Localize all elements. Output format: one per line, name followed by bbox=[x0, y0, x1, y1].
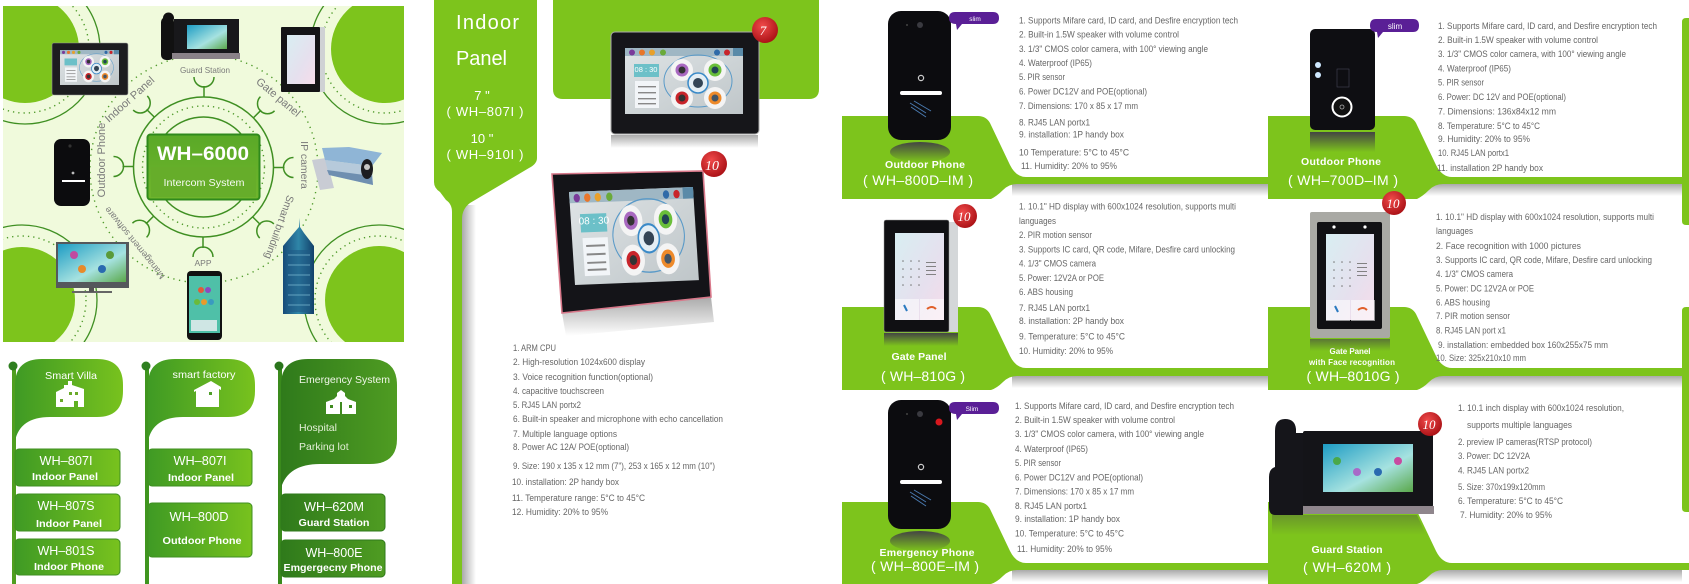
tab: guard station WH-620M: Guard Station bbox=[1312, 544, 1382, 556]
spec list: indoor panel bbox=[512, 343, 723, 517]
spec list: WH-8010G: 10. Size: 325x210x10 mm bbox=[1436, 353, 1526, 363]
button: WH-800D Outdoor Phone: Outdoor Phone bbox=[162, 535, 242, 547]
spec list: WH-700D-IM: 10. RJ45 LAN portx1 bbox=[1438, 148, 1509, 158]
model list: WH-807I and WH-910I: ( WH–910I ) bbox=[446, 147, 524, 162]
model list: WH-807I and WH-910I: ( WH–807I ) bbox=[446, 104, 524, 119]
panel: green banner bbox=[553, 0, 819, 99]
heading: Indoor Panel bbox=[456, 12, 519, 70]
spec list: WH-8010G: 8. RJ45 LAN port x1 bbox=[1436, 326, 1506, 336]
badge: 10 inch bbox=[701, 151, 727, 177]
spec list: indoor panel: 12. Humidity: 20% to 95% bbox=[512, 507, 608, 517]
flag title: Emergency System: Emergency System bbox=[299, 374, 390, 386]
button: WH-800D Outdoor Phone: WH–800D bbox=[170, 510, 228, 524]
spec list: WH-620M: 6. Temperature: 5°C to 45°C bbox=[1458, 496, 1563, 506]
device: outdoor phone WH-800D-IM bbox=[888, 11, 999, 162]
spec list: WH-800D-IM: 3. 1/3" CMOS color camera, with 100° viewing angle bbox=[1019, 44, 1208, 54]
button: WH-807S Indoor Panel: Indoor Panel bbox=[36, 518, 102, 530]
button: WH-807I Indoor Panel: Indoor Panel bbox=[168, 472, 234, 484]
tab: emergency phone WH-800E-IM: Emergency Phone bbox=[880, 547, 975, 559]
spec list: WH-620M: 4. RJ45 LAN portx2 bbox=[1458, 466, 1529, 476]
button: WH-807I Indoor Panel: WH–807I bbox=[174, 454, 226, 468]
spec list: WH-700D-IM: 5. PIR sensor bbox=[1438, 78, 1484, 88]
badge: 7 inch: 7 bbox=[760, 23, 767, 38]
model list: WH-807I and WH-910I: 7 " bbox=[474, 88, 490, 103]
device: gate panel bbox=[281, 27, 325, 92]
spec list: WH-800E-IM: 2. Built-in 1.5W speaker with volume control bbox=[1015, 415, 1175, 425]
spec list: indoor panel: 7. Multiple language options bbox=[513, 429, 617, 439]
spec list: WH-8010G: languages bbox=[1436, 226, 1473, 236]
bubble: slim bbox=[949, 402, 999, 420]
spec list: WH-800D-IM: 10 Temperature: 5°C to 45°C bbox=[1019, 148, 1129, 158]
spec list: WH-8010G: 3. Supports IC card, QR code, Mifare, Desfire card unlocking bbox=[1436, 255, 1652, 265]
flag title: smart factory: smart factory bbox=[172, 369, 236, 381]
button: WH-801S Indoor Phone: Indoor Phone bbox=[34, 561, 104, 573]
spec list: WH-8010G: 1. 10.1" HD display with 600x1024 resolution, supports multi bbox=[1436, 212, 1654, 222]
tab: outdoor phone WH-800D-IM: Outdoor Phone bbox=[885, 159, 965, 171]
spec list: indoor panel: 8. Power AC 12A/ POE(optional) bbox=[513, 442, 629, 452]
spec list: WH-800E-IM: 10. Temperature: 5°C to 45°C bbox=[1015, 528, 1124, 538]
device label: IP camera: IP camera bbox=[298, 141, 310, 189]
spec list: WH-700D-IM bbox=[1437, 21, 1657, 173]
stripe shadows bbox=[1012, 184, 1682, 582]
spec list: WH-810G: 5. Power: 12V2A or POE bbox=[1019, 273, 1104, 283]
center box: WH-6000 Intercom System: WH–6000 bbox=[157, 143, 249, 165]
spec list: indoor panel: 6. Built-in speaker and microphone with echo cancellation bbox=[513, 414, 723, 424]
bubble: slim bbox=[949, 12, 999, 30]
button: WH-807S Indoor Panel: WH–807S bbox=[38, 499, 94, 513]
spec list: WH-700D-IM: 3. 1/3" CMOS color camera, with 100° viewing angle bbox=[1438, 49, 1626, 59]
spec list: WH-700D-IM: 6. Power: DC 12V and POE(optional) bbox=[1438, 92, 1566, 102]
spec list: WH-620M: 2. preview IP cameras(RTSP protocol) bbox=[1458, 437, 1592, 447]
tab: outdoor phone WH-800D-IM: ( WH–800D–IM ) bbox=[863, 172, 973, 188]
right edge tabs bbox=[1682, 18, 1689, 512]
badge: 10 inch bbox=[1418, 412, 1442, 436]
device: outdoor phone bbox=[54, 139, 90, 206]
spec list: WH-810G: 10. Humidity: 20% to 95% bbox=[1019, 346, 1113, 356]
tab: outdoor phone WH-700D-IM: Outdoor Phone bbox=[1301, 156, 1381, 168]
spec list: WH-8010G: 7. PIR motion sensor bbox=[1436, 311, 1510, 321]
panel: smart factory flag bbox=[142, 359, 255, 584]
device: smart building bbox=[283, 218, 314, 314]
badge: 7 inch bbox=[752, 17, 778, 43]
device: guard station WH-620M bbox=[1269, 412, 1442, 535]
device label: Management software: Management software bbox=[102, 205, 167, 281]
list item: Hospital: Hospital bbox=[299, 422, 337, 434]
spec list: indoor panel: 1. ARM CPU bbox=[513, 343, 556, 353]
tab: emergency phone WH-800E-IM: ( WH–800E–IM ) bbox=[871, 558, 979, 574]
spec list: WH-700D-IM: 1. Supports Mifare card, ID card, and Desfire encryption tech bbox=[1438, 21, 1657, 31]
spec list: WH-810G: 6. ABS housing bbox=[1019, 287, 1073, 297]
spec list: WH-810G: 7. RJ45 LAN portx1 bbox=[1019, 303, 1090, 313]
panel: WH-6000 system diagram bbox=[0, 0, 460, 375]
device: mobile app phone bbox=[187, 271, 222, 340]
spec list: WH-8010G: 6. ABS housing bbox=[1436, 298, 1490, 308]
spec list: WH-8010G: 2. Face recognition with 1000 pictures bbox=[1436, 241, 1581, 251]
device: IP camera bbox=[312, 147, 382, 190]
pole shadow bbox=[462, 205, 476, 584]
tab: outdoor phone WH-800D-IM bbox=[842, 116, 1030, 199]
spec list: WH-800E-IM: 9. installation: 1P handy box bbox=[1015, 514, 1120, 524]
panel: indoor panel tab bbox=[434, 0, 537, 584]
spec list: WH-8010G: 5. Power: DC 12V2A or POE bbox=[1436, 284, 1534, 294]
badge: 10 inch bbox=[953, 204, 977, 228]
device: outdoor phone WH-700D-IM bbox=[1310, 19, 1419, 152]
spec list: WH-800D-IM: 5. PIR sensor bbox=[1019, 72, 1065, 82]
badge: 10 inch: 10 bbox=[705, 159, 719, 174]
screen clock: 08 : 30 bbox=[635, 65, 657, 74]
tab: gate panel WH-8010G bbox=[1268, 307, 1456, 390]
connector forks bbox=[114, 77, 294, 257]
spec list: WH-620M: 1. 10.1 inch display with 600x1024 resolution, bbox=[1458, 403, 1624, 413]
spec list: indoor panel: 9. Size: 190 x 135 x 12 mm (7"), 253 x 165 x 12 mm (10") bbox=[513, 461, 715, 471]
device: gate panel WH-810G bbox=[884, 204, 977, 346]
device: emergency phone WH-800E-IM bbox=[888, 400, 999, 551]
device: 7 inch indoor panel bbox=[611, 17, 778, 148]
tab: emergency phone WH-800E-IM bbox=[842, 502, 1030, 584]
spec list: WH-800D-IM: 2. Built-in 1.5W speaker with volume control bbox=[1019, 30, 1179, 40]
spec list: WH-620M: 5. Size: 370x199x120mm bbox=[1458, 482, 1545, 492]
icon: factory house bbox=[194, 381, 221, 407]
spec list: indoor panel: 3. Voice recognition function(optional) bbox=[513, 372, 653, 382]
icon: hospital bbox=[326, 390, 356, 414]
center box: WH-6000 Intercom System bbox=[148, 134, 260, 200]
spec list: WH-810G: 9. Temperature: 5°C to 45°C bbox=[1019, 332, 1125, 342]
button: WH-807I Indoor Panel bbox=[15, 449, 120, 486]
spec list: WH-800E-IM: 11. Humidity: 20% to 95% bbox=[1017, 544, 1112, 554]
button: WH-800E Emergency Phone: WH–800E bbox=[306, 546, 362, 560]
spec list: WH-800D-IM: 4. Waterproof (IP65) bbox=[1019, 58, 1092, 68]
button: WH-807I Indoor Panel: Indoor Panel bbox=[32, 471, 98, 483]
center box: WH-6000 Intercom System: Intercom System bbox=[164, 177, 245, 189]
tab: outdoor phone WH-700D-IM bbox=[1268, 116, 1456, 199]
spec list: WH-700D-IM: 4. Waterproof (IP65) bbox=[1438, 64, 1511, 74]
hub rings bbox=[90, 55, 318, 283]
spec list: WH-620M: supports multiple languages bbox=[1467, 420, 1572, 430]
spec list: WH-700D-IM: 9. Humidity: 20% to 95% bbox=[1438, 134, 1530, 144]
badge: 10 inch: 10 bbox=[958, 209, 971, 224]
spec list: WH-800D-IM bbox=[1019, 16, 1238, 171]
tab: gate panel WH-810G: Gate Panel bbox=[892, 351, 947, 363]
tab: gate panel WH-810G: ( WH–810G ) bbox=[881, 368, 965, 384]
badge: 10 inch: 10 bbox=[1422, 417, 1436, 432]
spec list: WH-800D-IM: 9. installation: 1P handy box bbox=[1019, 130, 1124, 140]
spec list: WH-700D-IM: 2. Built-in 1.5W speaker with volume control bbox=[1438, 35, 1598, 45]
badge: 10 inch: 10 bbox=[1386, 196, 1400, 211]
spec list: WH-620M: 3. Power: DC 12V2A bbox=[1458, 451, 1530, 461]
icon: villa bbox=[56, 381, 84, 407]
tab: outdoor phone WH-700D-IM: ( WH–700D–IM ) bbox=[1288, 172, 1398, 188]
device label: Gate panel: Gate panel bbox=[253, 76, 302, 120]
spec list: WH-700D-IM: 7. Dimensions: 136x84x12 mm bbox=[1438, 106, 1556, 116]
heading: Indoor Panel: Panel bbox=[456, 48, 507, 70]
spec list: WH-800E-IM bbox=[1015, 401, 1234, 554]
spec list: indoor panel: 4. capacitive touchscreen bbox=[513, 386, 604, 396]
button: WH-800D Outdoor Phone bbox=[148, 503, 252, 557]
spec list: WH-810G: 4. 1/3" CMOS camera bbox=[1019, 258, 1096, 268]
spec list: WH-620M: 7. Humidity: 20% to 95% bbox=[1460, 510, 1552, 520]
spec list: WH-810G: languages bbox=[1019, 216, 1056, 226]
list item: Parking lot: Parking lot bbox=[299, 441, 349, 453]
button: WH-801S Indoor Phone: WH–801S bbox=[38, 544, 94, 558]
button: WH-807S Indoor Panel bbox=[15, 494, 120, 531]
spec list: WH-8010G: 4. 1/3" CMOS camera bbox=[1436, 269, 1513, 279]
spec list: WH-800E-IM: 3. 1/3" CMOS color camera, with 100° viewing angle bbox=[1015, 429, 1204, 439]
spec list: WH-800D-IM: 1. Supports Mifare card, ID card, and Desfire encryption tech bbox=[1019, 16, 1238, 26]
spec list: WH-800E-IM: 7. Dimensions: 170 x 85 x 17 mm bbox=[1015, 486, 1134, 496]
spec list: WH-810G: 1. 10.1" HD display with 600x1024 resolution, supports multi bbox=[1019, 202, 1236, 212]
spec list: WH-800D-IM: 6. Power DC12V and POE(optional) bbox=[1019, 86, 1147, 96]
bubble: slim: Slim bbox=[966, 406, 978, 413]
spec list: WH-700D-IM: 11. installation 2P handy box bbox=[1437, 163, 1543, 173]
spec list: WH-800D-IM: 7. Dimensions: 170 x 85 x 17 mm bbox=[1019, 101, 1138, 111]
green stripes bbox=[1010, 177, 1689, 570]
spec list: WH-800E-IM: 1. Supports Mifare card, ID card, and Desfire encryption tech bbox=[1015, 401, 1234, 411]
panel: smart villa flag bbox=[8, 359, 123, 584]
tab: gate panel WH-810G bbox=[842, 307, 1030, 390]
spec list: WH-800D-IM: 11. Humidity: 20% to 95% bbox=[1021, 161, 1117, 171]
spec list: WH-800E-IM: 4. Waterproof (IP65) bbox=[1015, 444, 1088, 454]
device: indoor panel bbox=[52, 43, 128, 95]
device: gate panel WH-8010G bbox=[1310, 191, 1406, 351]
button: WH-800E Emergency Phone: Emgergecny Phone bbox=[284, 562, 383, 574]
tab: guard station WH-620M bbox=[1268, 502, 1456, 584]
spec list: indoor panel: 2. High-resolution 1024x600 display bbox=[513, 357, 645, 367]
button: WH-807I Indoor Panel bbox=[148, 449, 252, 486]
spec list: WH-800D-IM: 8. RJ45 LAN portx1 bbox=[1019, 118, 1090, 128]
tab: gate panel WH-8010G: ( WH–8010G ) bbox=[1306, 368, 1400, 384]
device: guard station bbox=[161, 12, 240, 60]
spec list: indoor panel: 10. installation: 2P handy box bbox=[512, 477, 619, 487]
tab: guard station WH-620M: ( WH–620M ) bbox=[1303, 559, 1391, 575]
device label: APP: APP bbox=[194, 258, 212, 268]
spec list: WH-8010G bbox=[1436, 212, 1654, 363]
spec list: WH-800E-IM: 8. RJ45 LAN portx1 bbox=[1015, 501, 1087, 511]
spec list: WH-810G bbox=[1019, 202, 1236, 356]
spec list: WH-810G: 2. PIR motion sensor bbox=[1019, 230, 1092, 240]
tab: gate panel WH-8010G: Gate Panel bbox=[1330, 347, 1370, 356]
spec list: WH-620M bbox=[1458, 403, 1624, 520]
button: WH-807I Indoor Panel: WH–807I bbox=[40, 454, 92, 468]
flag title: Smart Villa: Smart Villa bbox=[45, 370, 97, 382]
button: WH-620M Guard Station: WH–620M bbox=[304, 500, 364, 514]
button: WH-800E Emergency Phone bbox=[281, 540, 385, 577]
button: WH-620M Guard Station bbox=[281, 494, 385, 531]
spec list: indoor panel: 5. RJ45 LAN portx2 bbox=[513, 400, 581, 410]
spec list: indoor panel: 11. Temperature range: 5°C to 45°C bbox=[512, 493, 645, 503]
spec list: WH-8010G: 9. installation: embedded box 160x255x75 mm bbox=[1438, 340, 1608, 350]
device label: Smart building: Smart building bbox=[262, 193, 296, 261]
button: WH-620M Guard Station: Guard Station bbox=[298, 517, 370, 529]
device: 10 inch indoor panel bbox=[552, 151, 727, 336]
panel: emergency system flag bbox=[274, 359, 397, 584]
bubble: slim: slim bbox=[969, 16, 981, 23]
model list: WH-807I and WH-910I bbox=[446, 88, 524, 162]
button: WH-801S Indoor Phone bbox=[15, 539, 120, 575]
tab: gate panel WH-8010G: with Face recognition bbox=[1308, 358, 1395, 367]
corner discs bbox=[0, 0, 460, 375]
spec list: WH-810G: 8. installation: 2P handy box bbox=[1019, 316, 1124, 326]
model list: WH-807I and WH-910I: 10 " bbox=[471, 131, 494, 146]
screen clock: 08 : 30 bbox=[578, 215, 610, 228]
spec list: WH-700D-IM: 8. Temperature: 5°C to 45°C bbox=[1438, 121, 1540, 131]
device label: Guard Station: Guard Station bbox=[180, 65, 230, 75]
device label: Outdoor Phone: Outdoor Phone bbox=[96, 123, 108, 197]
heading: Indoor Panel: Indoor bbox=[456, 12, 519, 34]
spec list: WH-810G: 3. Supports IC card, QR code, Mifare, Desfire card unlocking bbox=[1019, 244, 1235, 254]
spec list: WH-800E-IM: 6. Power DC12V and POE(optional) bbox=[1015, 472, 1143, 482]
badge: 10 inch bbox=[1382, 191, 1406, 215]
spec list: WH-800E-IM: 5. PIR sensor bbox=[1015, 458, 1061, 468]
device: management software monitor bbox=[56, 242, 129, 293]
device label: Indoor Panel: Indoor Panel bbox=[103, 74, 157, 125]
bubble: slim: slim bbox=[1388, 22, 1402, 31]
